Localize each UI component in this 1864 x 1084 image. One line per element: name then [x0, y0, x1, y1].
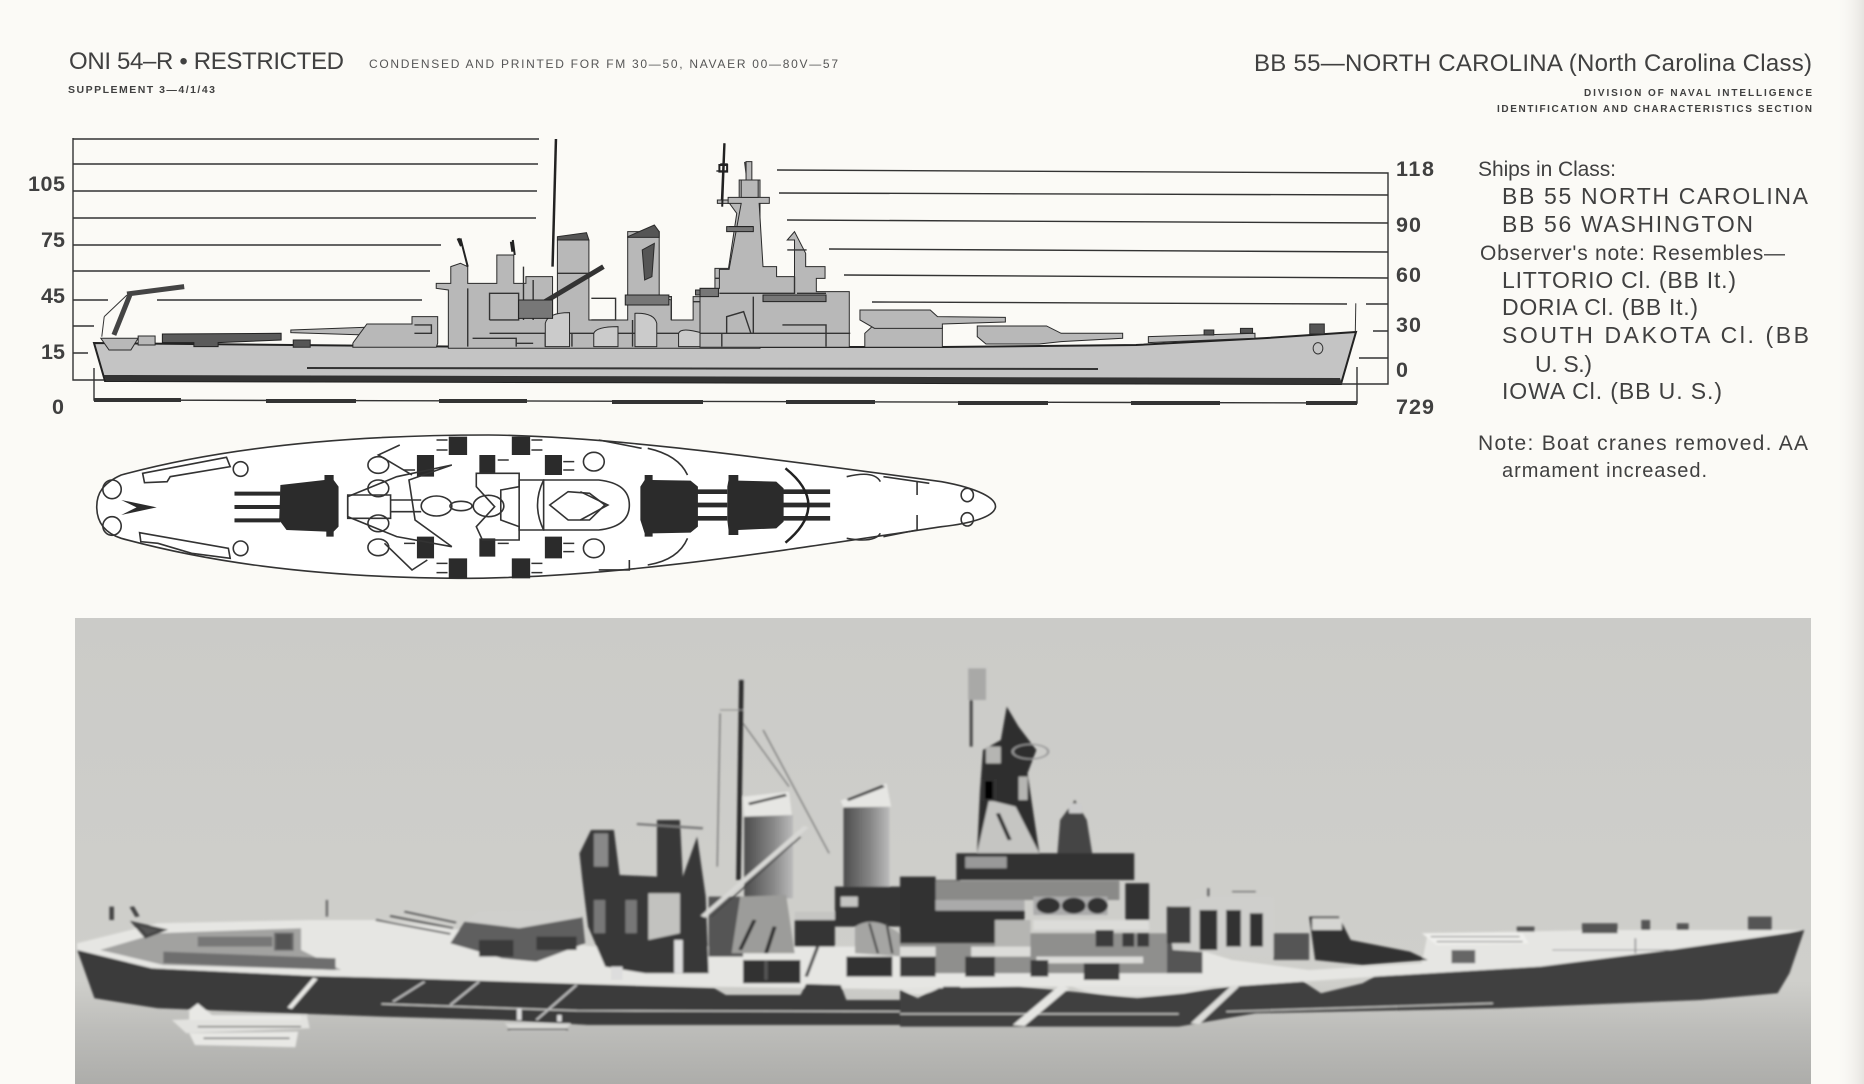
right height scale: 729 — [1396, 395, 1434, 419]
left height scale: 105 — [28, 172, 65, 196]
left height scale — [28, 138, 539, 419]
text block: ships in class and note: BB 55 NORTH CAROLINA — [1502, 183, 1809, 209]
text block: ships in class and note: LITTORIO Cl. (BB It.) — [1502, 267, 1736, 293]
header right: ship designation and division — [1254, 50, 1812, 115]
length scale bar — [94, 367, 1357, 405]
text block: ships in class and note: Observer's note: Resembles— — [1480, 242, 1785, 265]
small boats alongside — [172, 1015, 310, 1033]
right height scale: 30 — [1396, 313, 1421, 337]
right height scale: 0 — [1396, 358, 1408, 382]
right height scale — [777, 157, 1434, 419]
header left: ONI 54-R restricted — [68, 48, 838, 96]
bridge block — [900, 853, 1149, 943]
left height scale: 45 — [41, 284, 65, 308]
chart: profile silhouette with height and length scales — [28, 138, 1434, 419]
header right: ship designation and division: IDENTIFICATION AND CHARACTERISTICS SECTION — [1497, 104, 1812, 115]
photograph: battleship at anchor — [75, 618, 1811, 1084]
header right: ship designation and division: DIVISION OF NAVAL INTELLIGENCE — [1584, 88, 1812, 99]
text block: ships in class and note: Ships in Class: — [1478, 158, 1616, 181]
right height scale: 90 — [1396, 213, 1421, 237]
forward turret — [1167, 897, 1274, 957]
text block: ships in class and note — [1478, 158, 1809, 482]
text block: ships in class and note: SOUTH DAKOTA Cl. (BB — [1502, 322, 1809, 348]
left height scale: 75 — [41, 228, 65, 252]
text block: ships in class and note: IOWA Cl. (BB U. S.) — [1502, 378, 1722, 404]
stern wedge — [121, 500, 157, 515]
forward tower, forward turrets and bow — [700, 143, 1356, 354]
left height scale: 15 — [41, 340, 65, 364]
left height scale: 0 — [52, 395, 64, 419]
secondary battery mounts — [404, 437, 574, 578]
text block: ships in class and note: Note: Boat cranes removed. AA — [1478, 432, 1808, 455]
after superstructure, turrets and funnels — [101, 139, 760, 350]
header left: ONI 54-R restricted: SUPPLEMENT 3—4/1/43 — [68, 84, 215, 96]
header left: ONI 54-R restricted: CONDENSED AND PRINTED FOR FM 30—50, NAVAER 00—80V—57 — [369, 57, 838, 71]
forward half of ship — [900, 668, 1804, 1027]
text block: ships in class and note: DORIA Cl. (BB It.) — [1502, 294, 1698, 320]
ship profile hull — [94, 332, 1356, 384]
chart: plan view of deck — [97, 435, 995, 578]
right height scale: 60 — [1396, 263, 1421, 287]
text block: ships in class and note: BB 56 WASHINGTON — [1502, 211, 1753, 237]
header right: ship designation and division: BB 55—NORTH CAROLINA (North Carolina Class) — [1254, 50, 1812, 77]
main battery turrets — [234, 468, 830, 543]
after fire control and mainmast — [579, 820, 709, 973]
right height scale: 118 — [1396, 157, 1434, 181]
bow fittings — [1517, 917, 1772, 933]
text block: ships in class and note: armament increased. — [1502, 460, 1707, 482]
deck fittings and boats — [103, 440, 973, 570]
text block: ships in class and note: U. S.) — [1535, 351, 1592, 377]
after half of ship — [77, 680, 960, 1047]
director tower and radar — [968, 668, 986, 700]
header left: ONI 54-R restricted: ONI 54–R • RESTRICTED — [69, 48, 344, 75]
